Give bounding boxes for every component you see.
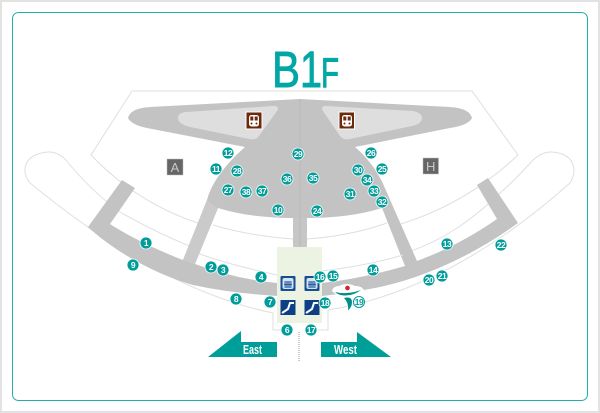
location markers: 8 [234,294,239,304]
location markers: 31 [346,189,355,199]
location markers: 17 [307,325,316,335]
location markers [127,147,507,336]
location markers: 35 [309,173,318,183]
location markers: 34 [363,175,372,185]
location markers: 14 [369,265,378,275]
location markers: 12 [224,148,233,158]
arrow: West: West [334,343,358,357]
location markers: 1 [144,238,149,248]
location markers: 4 [259,272,264,282]
location markers: 37 [258,186,267,196]
icon: escalator left [280,300,296,315]
zone A: A [171,160,180,175]
dotted walkway [298,332,300,362]
icon: train left [246,112,262,129]
location markers: 28 [233,166,242,176]
location markers: 32 [378,197,387,207]
title: B1F: B [272,41,300,98]
arrow: West [321,332,391,357]
location markers: 38 [242,187,251,197]
icon: elevator right [304,276,320,291]
arrow: East: East [243,343,263,357]
location markers: 7 [268,297,273,307]
location markers: 30 [354,165,363,175]
location markers: 13 [443,239,452,249]
marker 19 outlined [354,296,364,308]
arrow: East [208,331,277,357]
zone H [423,158,438,174]
central light green area [277,247,322,323]
location markers: 2 [209,262,214,272]
location markers: 24 [313,206,322,216]
location markers: 3 [221,265,226,275]
location markers: 15 [329,271,338,281]
location markers: 10 [274,205,283,215]
location markers: 20 [425,275,434,285]
location markers: 33 [370,186,379,196]
location markers: 27 [224,185,233,195]
location markers: 29 [294,149,303,159]
zone A [167,159,183,175]
icon: escalator right [304,300,320,315]
building outline [25,91,574,330]
location markers: 9 [131,260,136,270]
icon: train right [339,112,354,129]
location markers: 36 [283,174,292,184]
title: B1F [272,41,339,98]
icon: elevator left [280,276,296,291]
location markers: 11 [212,164,221,174]
location markers: 22 [497,240,506,250]
concourse: grey wings and hub [88,99,518,296]
marker 19 outlined: 19 [355,297,364,307]
location markers: 6 [285,325,290,335]
location markers: 16 [316,272,325,282]
location markers: 25 [378,164,387,174]
logo: airline emblem [332,284,364,310]
location markers: 26 [367,148,376,158]
zone H: H [426,159,435,174]
location markers: 21 [438,271,447,281]
title: B1F: 1 [300,41,322,98]
title: B1F: F [321,49,339,96]
location markers: 18 [321,298,330,308]
